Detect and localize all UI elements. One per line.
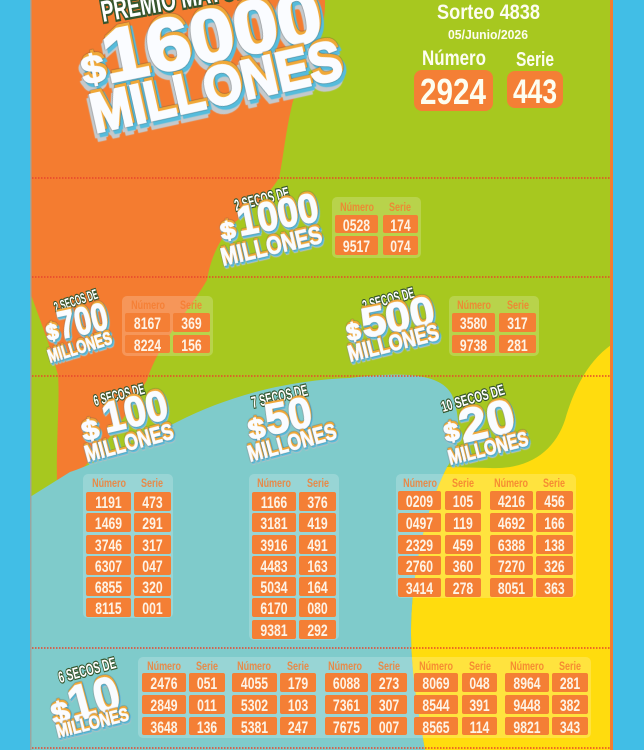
logo: 6 secos de 10 millones bbox=[48, 655, 131, 742]
table: 20 millones: 2760 bbox=[406, 558, 433, 577]
table: 10 millones: 9448 bbox=[513, 697, 541, 716]
logo: 2 secos de 700 millones: 2 SECOS DE bbox=[52, 286, 100, 315]
logo line: dollar sign: $ bbox=[77, 46, 109, 94]
table: 10 millones: 8964 bbox=[513, 675, 541, 694]
table: 1000 millones: 9517 bbox=[343, 238, 370, 257]
logo: 2 secos de 1000 millones: $ bbox=[218, 216, 239, 246]
logo: 6 secos de 100 millones: $ bbox=[79, 414, 102, 447]
logo: 2 secos de 500 millones: 2 SECOS DE bbox=[361, 285, 416, 315]
table: 1000 millones: 074 bbox=[390, 238, 411, 257]
table: 500 millones: Número bbox=[457, 299, 492, 312]
table: 50 millones: 163 bbox=[307, 558, 328, 577]
table: 10 millones: 7675 bbox=[333, 719, 360, 738]
background: yellow shape bbox=[411, 345, 611, 750]
logo: 6 secos de 10 millones: $ bbox=[48, 695, 73, 732]
table: 20 millones: Número bbox=[494, 477, 529, 490]
logo: 6 secos de 10 millones: 10 bbox=[61, 665, 126, 733]
table: 10 millones: 179 bbox=[288, 675, 308, 694]
table: 100 millones: 320 bbox=[142, 579, 163, 598]
logo: 2 secos de 1000 millones: 2 SECOS DE bbox=[233, 185, 291, 215]
table: 20 millones: Serie bbox=[543, 477, 565, 490]
table: 50 millones: Número bbox=[257, 477, 292, 490]
logo line: millones: MILLONES bbox=[84, 28, 348, 145]
background: orange shape bbox=[30, 0, 325, 484]
table: 10 millones: 5381 bbox=[241, 719, 268, 738]
table: 20 millones: 166 bbox=[544, 515, 565, 534]
table: 10 millones: 048 bbox=[469, 675, 490, 694]
table: 20 millones bbox=[396, 474, 576, 599]
table: 10 millones: Número bbox=[147, 660, 182, 673]
table: 10 millones: Número bbox=[328, 660, 363, 673]
table: 50 millones: 080 bbox=[307, 600, 328, 619]
logo: 2 secos de 500 millones bbox=[344, 285, 441, 367]
table: 100 millones: 047 bbox=[142, 558, 163, 577]
table: 10 millones: 3648 bbox=[150, 719, 178, 738]
table: 10 millones: Serie bbox=[378, 660, 400, 673]
table: 10 millones: 7361 bbox=[333, 697, 360, 716]
table: 100 millones: 1191 bbox=[95, 494, 122, 513]
table: 10 millones: 343 bbox=[560, 719, 580, 738]
table: 20 millones: 326 bbox=[544, 558, 565, 577]
table: 100 millones: 3746 bbox=[95, 537, 122, 556]
table: 10 millones: 2476 bbox=[150, 675, 178, 694]
logo: 2 secos de 1000 millones: MILLONES bbox=[218, 221, 325, 272]
table: 700 millones: 8224 bbox=[134, 337, 161, 356]
table: 50 millones: 419 bbox=[307, 515, 328, 534]
table: 10 millones: 051 bbox=[197, 675, 217, 694]
logo: premio mayor 16000 millones bbox=[77, 0, 348, 145]
table: 10 millones: Número bbox=[510, 660, 545, 673]
label: serie: Serie bbox=[516, 49, 554, 71]
table: 500 millones bbox=[449, 296, 539, 356]
table: 10 millones: 247 bbox=[288, 719, 308, 738]
table: 700 millones: 8167 bbox=[134, 315, 161, 334]
logo: 2 secos de 1000 millones: 1000 bbox=[233, 184, 322, 245]
table: 100 millones: 6307 bbox=[95, 558, 122, 577]
table: 10 millones: 136 bbox=[197, 719, 217, 738]
table: 500 millones: 3580 bbox=[460, 315, 487, 334]
table: 50 millones: 292 bbox=[307, 622, 328, 641]
table: 50 millones bbox=[249, 474, 339, 641]
table: 20 millones: 119 bbox=[453, 515, 473, 534]
table: 500 millones: 281 bbox=[507, 337, 528, 356]
table: 10 millones: Serie bbox=[559, 660, 581, 673]
table: 20 millones: 105 bbox=[453, 493, 473, 512]
logo: 10 secos de 20 millones: 20 bbox=[453, 389, 520, 453]
table: 10 millones: 391 bbox=[469, 697, 490, 716]
logo: 10 secos de 20 millones: $ bbox=[441, 417, 462, 448]
table: 20 millones: 7270 bbox=[498, 558, 525, 577]
table: 50 millones: 376 bbox=[307, 494, 328, 513]
table: 100 millones: Serie bbox=[141, 477, 163, 490]
table: 10 millones: 114 bbox=[470, 719, 489, 738]
table: 1000 millones: 0528 bbox=[343, 217, 370, 236]
logo: 2 secos de 700 millones: 700 bbox=[54, 295, 112, 348]
table: 50 millones: 5034 bbox=[260, 579, 288, 598]
table: 10 millones: 2849 bbox=[150, 697, 178, 716]
logo: 6 secos de 100 millones bbox=[79, 381, 176, 467]
table: 1000 millones bbox=[332, 197, 421, 258]
winning number: 2924 bbox=[420, 71, 486, 112]
table: 100 millones: 001 bbox=[142, 600, 163, 619]
logo: 2 secos de 500 millones: MILLONES bbox=[345, 319, 441, 367]
draw number: Sorteo 4838 bbox=[437, 1, 540, 24]
table: 1000 millones: 174 bbox=[390, 217, 411, 236]
draw date: 05/Junio/2026 bbox=[448, 27, 528, 42]
table: 20 millones: 138 bbox=[544, 537, 565, 556]
logo: 2 secos de 500 millones: 500 bbox=[357, 287, 438, 347]
table: 20 millones: Serie bbox=[452, 477, 474, 490]
table: 1000 millones: Número bbox=[340, 201, 375, 214]
logo: 6 secos de 10 millones: 6 SECOS DE bbox=[57, 655, 118, 687]
table: 1000 millones: Serie bbox=[389, 201, 411, 214]
table: 10 millones: 8565 bbox=[422, 719, 450, 738]
table: 50 millones: 3916 bbox=[260, 537, 288, 556]
table: 50 millones: 4483 bbox=[260, 558, 288, 577]
logo: 7 secos de 50 millones: 50 bbox=[261, 388, 316, 445]
logo: 10 secos de 20 millones: 10 SECOS DE bbox=[439, 382, 507, 416]
table: 100 millones: 8115 bbox=[95, 600, 122, 619]
table: 20 millones: 2329 bbox=[406, 537, 433, 556]
table: 10 millones: 382 bbox=[560, 697, 580, 716]
table: 700 millones: Número bbox=[131, 299, 166, 312]
logo: 2 secos de 700 millones: MILLONES bbox=[45, 328, 114, 367]
table: 20 millones: Número bbox=[403, 477, 438, 490]
table: 20 millones: 456 bbox=[544, 493, 565, 512]
table: 50 millones: 1166 bbox=[261, 494, 287, 513]
table: 20 millones: 0497 bbox=[406, 515, 433, 534]
table: 500 millones: 9738 bbox=[460, 337, 487, 356]
table: 500 millones: Serie bbox=[507, 299, 529, 312]
logo: 7 secos de 50 millones: MILLONES bbox=[245, 418, 339, 467]
table: 100 millones: 291 bbox=[142, 515, 163, 534]
table: 10 millones: Serie bbox=[469, 660, 491, 673]
table: 10 millones: Serie bbox=[287, 660, 309, 673]
table: 100 millones: 473 bbox=[142, 494, 163, 513]
table: 20 millones: 0209 bbox=[406, 493, 433, 512]
table: 100 millones: 1469 bbox=[95, 515, 122, 534]
table: 10 millones: 9821 bbox=[513, 719, 541, 738]
table: 100 millones bbox=[83, 474, 173, 619]
table: 10 millones: 6088 bbox=[333, 675, 360, 694]
table: 20 millones: 6388 bbox=[498, 537, 525, 556]
table: 20 millones: 4216 bbox=[498, 493, 525, 512]
table: 50 millones: 491 bbox=[307, 537, 328, 556]
table: 10 millones: 307 bbox=[379, 697, 399, 716]
table: 700 millones bbox=[122, 296, 213, 356]
table: 10 millones: Número bbox=[419, 660, 454, 673]
table: 10 millones bbox=[138, 657, 591, 738]
table: 100 millones: Número bbox=[92, 477, 127, 490]
label: numero: Número bbox=[422, 47, 486, 70]
table: 50 millones: Serie bbox=[307, 477, 329, 490]
logo: 2 secos de 700 millones: $ bbox=[44, 319, 61, 346]
table: 20 millones: 363 bbox=[544, 580, 565, 599]
table: 20 millones: 459 bbox=[453, 537, 473, 556]
table: 100 millones: 6855 bbox=[95, 579, 122, 598]
table: 700 millones: Serie bbox=[180, 299, 202, 312]
header: draw info bbox=[414, 1, 563, 112]
table: 10 millones: 007 bbox=[379, 719, 399, 738]
table: 20 millones: 3414 bbox=[406, 580, 433, 599]
table: 50 millones: 6170 bbox=[260, 600, 288, 619]
table: 10 millones: 4055 bbox=[241, 675, 268, 694]
logo: 7 secos de 50 millones bbox=[245, 382, 339, 467]
table: 50 millones: 164 bbox=[307, 579, 328, 598]
logo: 6 secos de 100 millones: 6 SECOS DE bbox=[92, 381, 146, 410]
logo: 2 secos de 1000 millones bbox=[218, 184, 325, 272]
table: 20 millones: 360 bbox=[453, 558, 473, 577]
logo: 6 secos de 100 millones: MILLONES bbox=[82, 418, 176, 467]
logo: 2 secos de 700 millones bbox=[44, 286, 114, 367]
table: 10 millones: Número bbox=[237, 660, 272, 673]
table: 20 millones: 8051 bbox=[498, 580, 525, 599]
winning series: 443 bbox=[513, 73, 557, 111]
logo: 7 secos de 50 millones: 7 SECOS DE bbox=[250, 382, 310, 412]
table: 100 millones: 317 bbox=[142, 537, 163, 556]
table: 700 millones: 369 bbox=[181, 315, 202, 334]
table: 10 millones: 5302 bbox=[241, 697, 268, 716]
logo: 6 secos de 10 millones: MILLONES bbox=[54, 705, 131, 742]
table: 50 millones: 3181 bbox=[260, 515, 288, 534]
table: 10 millones: 273 bbox=[379, 675, 399, 694]
logo: 10 secos de 20 millones bbox=[439, 382, 531, 470]
logo: 6 secos de 100 millones: 100 bbox=[97, 381, 173, 443]
table: 10 millones: 281 bbox=[560, 675, 580, 694]
table: 10 millones: 8544 bbox=[422, 697, 450, 716]
table: 20 millones: 278 bbox=[453, 580, 473, 599]
table: 500 millones: 317 bbox=[507, 315, 528, 334]
table: 20 millones: 4692 bbox=[498, 515, 525, 534]
table: 50 millones: 9381 bbox=[260, 622, 288, 641]
logo: 7 secos de 50 millones: $ bbox=[245, 412, 268, 446]
table: 10 millones: Serie bbox=[196, 660, 218, 673]
table: 10 millones: 8069 bbox=[422, 675, 450, 694]
logo: 2 secos de 500 millones: $ bbox=[344, 318, 364, 347]
table: 10 millones: 103 bbox=[288, 697, 308, 716]
logo: 10 secos de 20 millones: MILLONES bbox=[446, 428, 531, 470]
table: 10 millones: 011 bbox=[197, 697, 217, 716]
table: 700 millones: 156 bbox=[181, 337, 202, 356]
background: teal shape bbox=[30, 375, 458, 750]
